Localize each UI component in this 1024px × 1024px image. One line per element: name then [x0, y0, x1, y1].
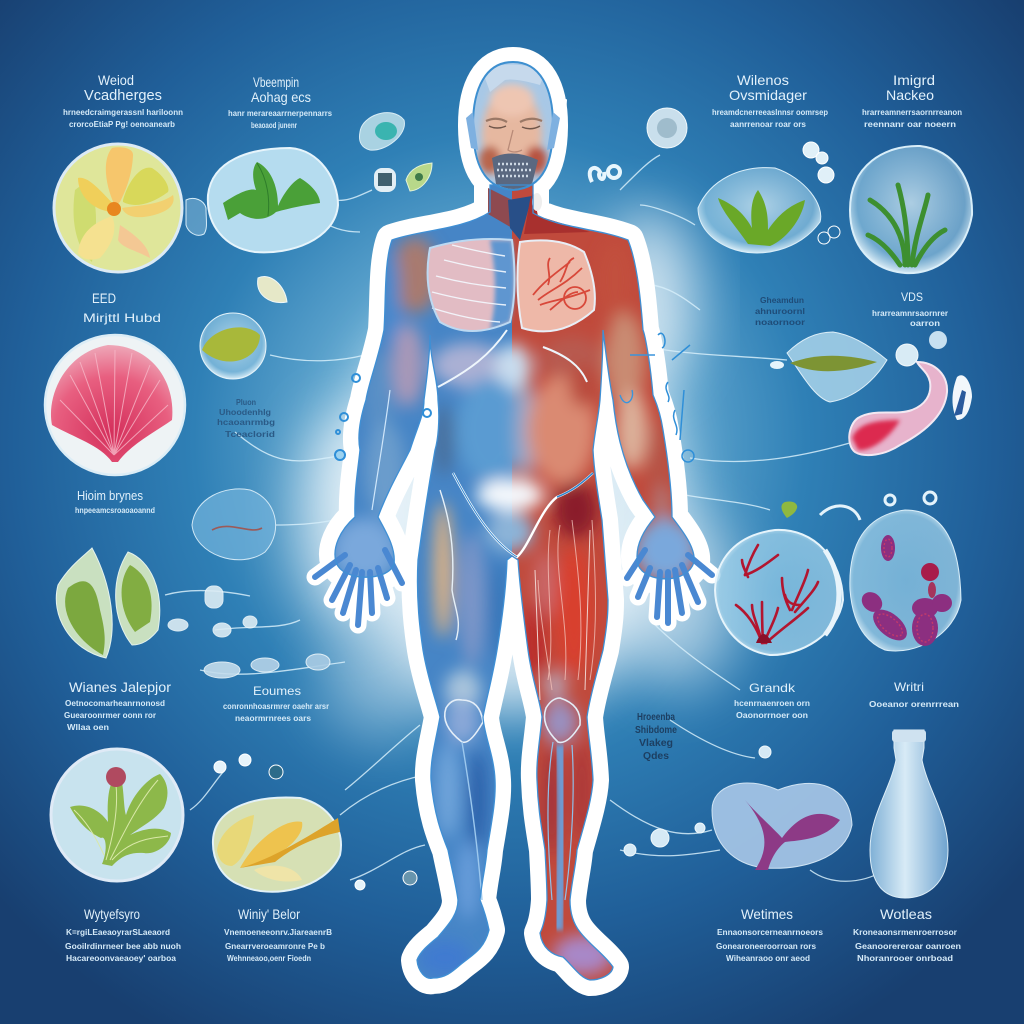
icon: bottle	[870, 730, 948, 898]
text block: bottom right 2: Nhoranrooer onrboad	[857, 954, 953, 963]
text block: left heading 4	[64, 679, 171, 732]
icon: small droplets bottom left	[214, 754, 417, 890]
text block: left middle 2: Eoumes	[253, 684, 301, 698]
text block: bottom right 2: Kroneaonsrmenroerrosor	[853, 928, 957, 937]
text block: left heading EED: Mirjttl Hubd	[83, 311, 161, 325]
panel: lemons bubble	[213, 797, 341, 892]
icon: pale drop	[258, 277, 287, 303]
text block: right organ label: Gheamdun	[760, 296, 804, 305]
icon: mini tiles	[374, 163, 432, 192]
text block: left heading 3: hnpeeamcsroaoaoannd	[75, 506, 155, 515]
text block: right water: Ooeanor orenrrrean	[869, 700, 959, 709]
text block: bottom right 1: Ennaonsorcerneanrnoeors	[717, 928, 824, 937]
icon: blue scribbles right of arm	[658, 333, 694, 462]
neck anatomy	[488, 188, 590, 240]
panel: olive lens	[200, 313, 266, 379]
text block: top right 1: Wilenos	[737, 72, 789, 88]
text block: right water	[869, 680, 959, 709]
figure halo	[315, 62, 712, 980]
text block: bottom right 1: Wiheanraoo onr aeod	[726, 954, 810, 963]
text block: bottom left 2: Winiy' Belor	[238, 906, 300, 922]
text block: bottom left 1: Hacareoonvaeaoey' oarboa	[66, 954, 177, 963]
text block: bottom left 2: Vnemoeneeonrv.JiareaenrB	[224, 928, 332, 937]
text block: organ callout: Shibdome	[635, 725, 677, 736]
text block: top left 2	[228, 74, 333, 130]
text block: right organ label	[755, 296, 805, 327]
text block: left heading EED: EED	[92, 290, 116, 306]
text block: top left 2: Vbeempin	[253, 74, 299, 90]
text block: right organ label: ahnuroornl	[755, 307, 805, 316]
text block: right middle: Grandk	[749, 681, 796, 695]
text block: bottom left 1: Gooilrdinrneer bee abb nuoh	[65, 942, 181, 951]
panel: top-left flower	[54, 144, 182, 272]
right thigh streaks	[538, 520, 596, 690]
chest organ	[533, 258, 590, 310]
contour lines	[372, 239, 655, 900]
text block: organ callout: Qdes	[643, 751, 669, 762]
body outline	[335, 185, 694, 980]
rib lines	[432, 245, 506, 322]
text block: right middle: hcenrnaenroen orn	[734, 699, 810, 708]
face details	[466, 62, 560, 190]
text block: left heading EED	[83, 290, 161, 325]
text block: bottom right 2: Wotleas	[880, 906, 932, 922]
text block: top left 2: beaoaod junenr	[251, 121, 297, 130]
panel: right lens with leaf	[770, 332, 887, 402]
shin centre strip	[558, 745, 562, 930]
icon: teal cell	[359, 113, 404, 150]
text block: left organ label: Tceaclorid	[225, 430, 275, 439]
panel: bottom-left plant circle	[51, 749, 183, 881]
text block: top right 2: Nackeo	[886, 87, 934, 103]
text block: right organ label: noaornoor	[755, 318, 805, 327]
icon: small glass capsules	[168, 586, 330, 678]
text block: top left 1: crorcoEtiaP Pg! oenoanearb	[69, 120, 175, 129]
text block: bottom right 1: Gonearoneeroorroan rors	[716, 942, 817, 951]
text block: top left 2: Aohag ecs	[251, 89, 311, 105]
text block: top right 1: hreamdcnerreeaslnnsr oomrsep	[712, 108, 828, 117]
text block: bottom left 1	[65, 906, 181, 963]
panel: left middle bubble	[192, 489, 276, 560]
text block: organ callout: Hroeenba	[637, 712, 675, 723]
chest panels	[428, 239, 595, 331]
icon: lower right droplets	[624, 746, 771, 856]
text block: left middle 2	[223, 684, 329, 723]
icon: bubble rings	[820, 492, 936, 520]
panel: stomach	[849, 331, 972, 455]
body colour zones	[336, 186, 694, 980]
text block: top left 1: Vcadherges	[84, 87, 162, 104]
text block: right middle	[734, 681, 810, 720]
text block: left middle 2: conronnhoasrmrer oaehr arsr	[223, 702, 329, 711]
icon: blue curl	[590, 166, 620, 182]
panel: purple organ	[712, 783, 852, 870]
icon: top circle cell	[647, 108, 687, 148]
text block: top left 1	[63, 72, 183, 129]
text block: left organ label	[217, 398, 275, 439]
text block: bottom left 1: K=rgiLEaeaoyrarSLaeaord	[66, 928, 170, 937]
text block: left heading 4: Oetnocomarheanrnonosd	[65, 699, 165, 708]
text block: top left 1: hrneedcraimgerassnl hariloonn	[63, 108, 183, 117]
text block: top right 2: Imigrd	[893, 72, 935, 88]
text block: bottom left 2: Gnearrveroeamronre Pe b	[225, 942, 325, 951]
panel: top-right seaweed bubble	[698, 168, 821, 253]
text block: left middle 2: neaormrnrees oars	[235, 714, 312, 723]
text block: bottom left 2	[224, 906, 332, 963]
panel: pink fan circle	[45, 335, 185, 475]
text block: bottom right 1: Wetimes	[741, 906, 793, 922]
text block: bottom left 2: Wehnneaoo,oenr Fioedn	[227, 954, 311, 963]
panel: two leaves	[56, 548, 160, 658]
panel: purple coral bubble	[850, 510, 961, 651]
text block: right middle: Oaonorrnoer oon	[736, 711, 808, 720]
panel: red coral bubble	[715, 502, 843, 655]
text block: top right 1: aanrrenoar roar ors	[730, 120, 807, 129]
text block: right VDS: hrarreamnrsaornrer	[872, 309, 948, 318]
text block: bottom right 2	[853, 906, 961, 963]
text block: left heading 3: Hioim brynes	[77, 488, 143, 503]
icon: white bubbles	[803, 142, 840, 244]
text block: bottom left 1: Wytyefsyro	[84, 906, 140, 922]
text block: right VDS	[872, 290, 948, 328]
text block: left heading 4: Guearoonrmer oonn ror	[64, 711, 156, 720]
text block: right water: Writri	[894, 680, 924, 694]
text block: left heading 4: Wllaa oen	[67, 723, 109, 732]
head	[474, 63, 552, 189]
hand fingers	[315, 550, 712, 625]
text block: right VDS: oarron	[910, 319, 940, 328]
icon: glass droplet	[186, 198, 206, 235]
text block: right VDS: VDS	[901, 290, 923, 304]
text block: bottom right 1	[716, 906, 824, 963]
text block: top right 1	[712, 72, 828, 129]
panel: top-right plant circle	[850, 146, 972, 273]
text block: organ callout: Vlakeg	[639, 738, 673, 749]
text block: left heading 4: Wianes Jalepjor	[69, 679, 171, 695]
human body figure	[300, 55, 732, 1000]
text block: top right 2: reennanr oar noeern	[864, 120, 956, 129]
text block: left heading 3	[75, 488, 155, 515]
connector lines	[165, 155, 885, 881]
icon: blue rings left of arm	[335, 374, 431, 460]
text block: left organ label: Pluon	[236, 398, 256, 407]
panel: top-left leaf bubble	[208, 148, 338, 252]
text block: top left 2: hanr merareaarrnerpennarrs	[228, 109, 333, 118]
text block: top right 2	[862, 72, 962, 129]
text block: top left 1: Weiod	[98, 72, 134, 88]
text block: top right 1: Ovsmidager	[729, 87, 807, 103]
text block: left organ label: Uhoodenhlg	[219, 408, 271, 417]
text block: left organ label: hcaoanrmbg	[217, 418, 275, 427]
text block: organ callout	[635, 712, 677, 762]
text block: bottom right 2: Geanoorereroar oanroen	[855, 942, 961, 951]
text block: top right 2: hrarreamnerrsaornrreanon	[862, 108, 962, 117]
